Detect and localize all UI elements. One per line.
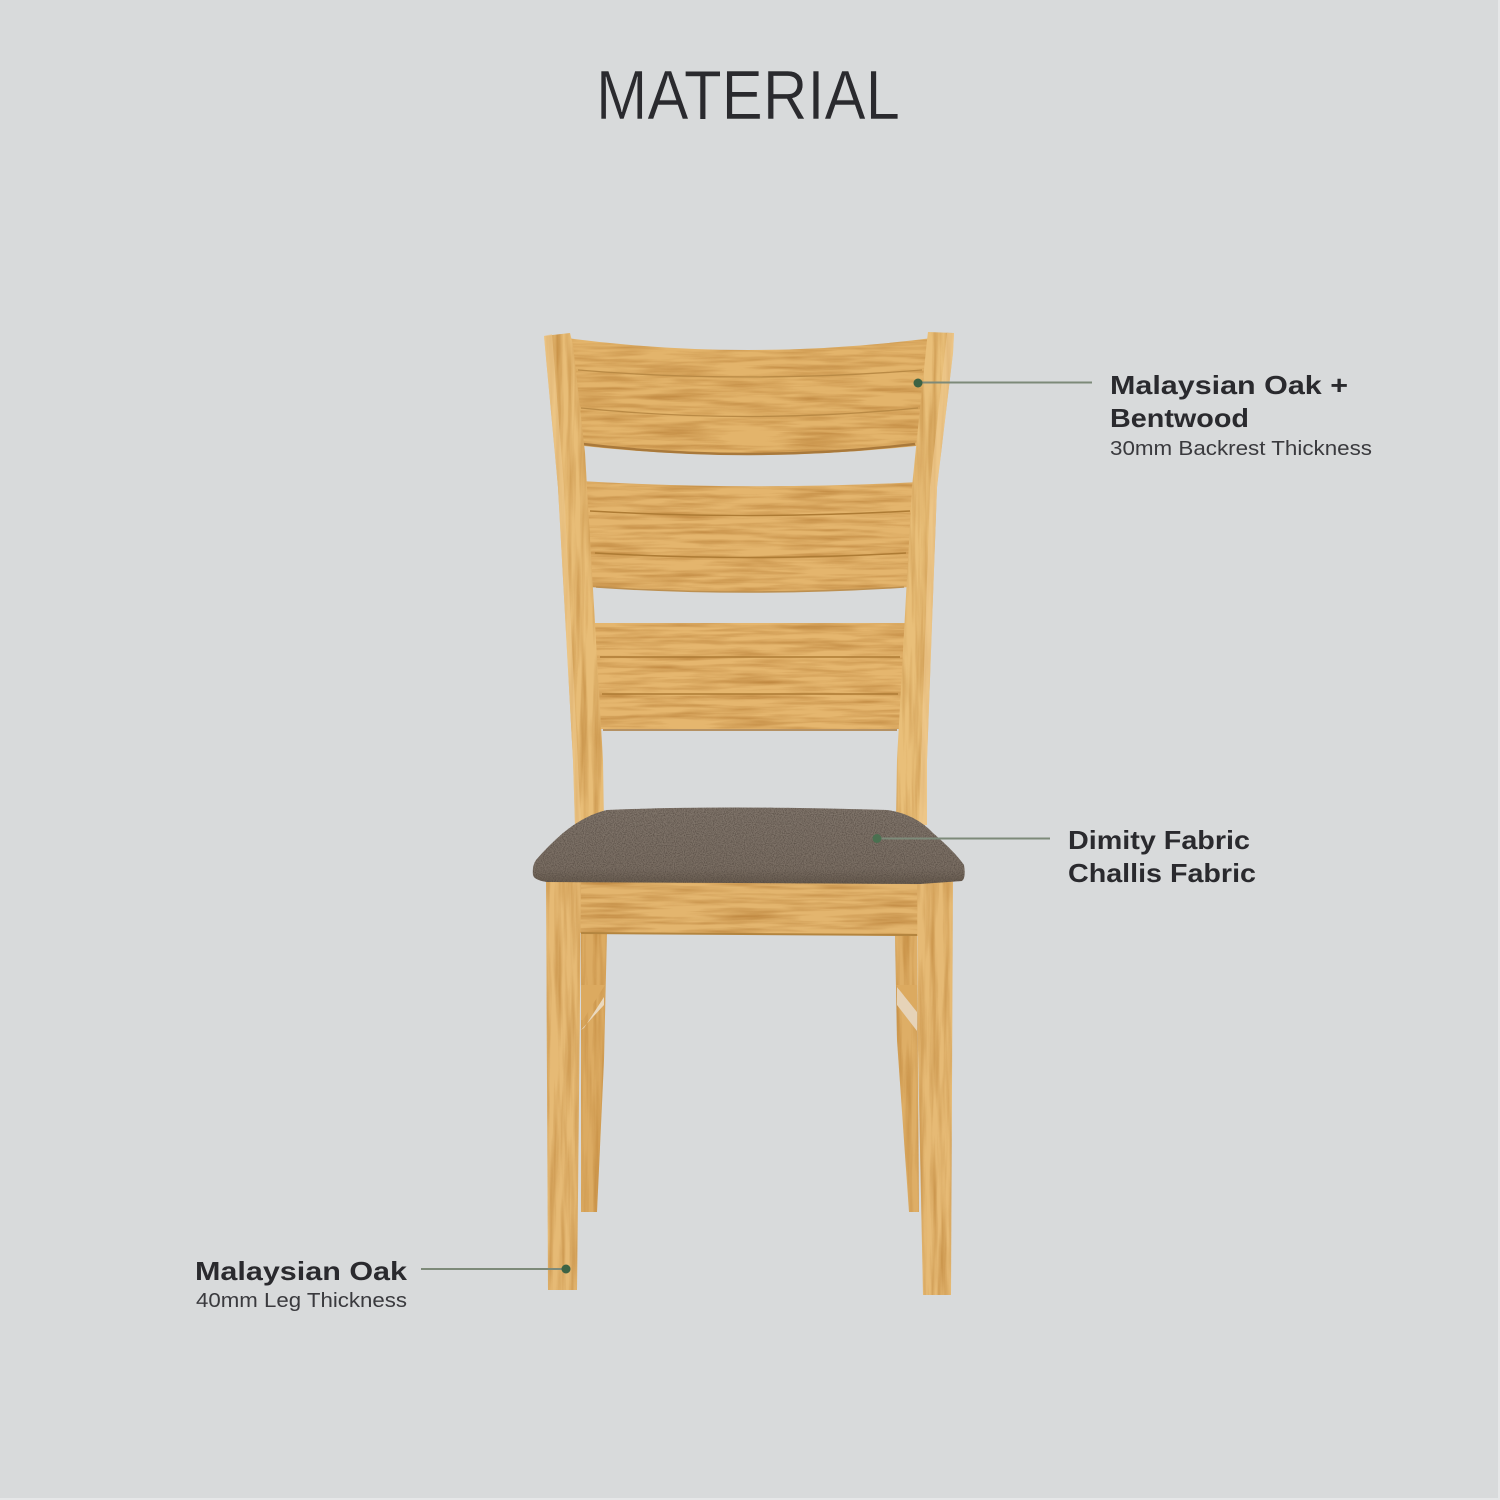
callout: seat fabric	[872, 825, 1256, 888]
marker dot	[562, 1264, 570, 1274]
leg stretchers	[581, 985, 917, 1031]
label heading second line: Bentwood	[1110, 403, 1249, 433]
leader line	[421, 1268, 566, 1270]
label heading: Malaysian Oak +	[1110, 370, 1348, 400]
label detail: 40mm Leg Thickness	[196, 1290, 407, 1312]
chair illustration	[533, 332, 965, 1295]
leader line	[918, 382, 1092, 384]
callout: leg material	[195, 1256, 570, 1312]
callout: backrest material	[914, 370, 1372, 460]
label detail: 30mm Backrest Thickness	[1110, 438, 1372, 460]
left back post	[544, 333, 604, 825]
title: MATERIAL	[596, 56, 900, 134]
front left leg	[546, 876, 581, 1290]
label heading: Malaysian Oak	[195, 1256, 408, 1286]
seat apron	[578, 876, 920, 936]
right back post	[896, 332, 954, 825]
leader line	[877, 838, 1050, 840]
front right leg	[917, 876, 953, 1295]
label second line: Challis Fabric	[1068, 858, 1256, 888]
marker dot	[872, 834, 882, 843]
middle backrest slat	[580, 481, 920, 592]
marker dot	[914, 378, 922, 388]
upholstered seat	[533, 808, 965, 884]
back legs	[581, 930, 919, 1212]
label first line: Dimity Fabric	[1068, 825, 1250, 855]
lower backrest slat	[590, 623, 910, 730]
top backrest slat	[566, 338, 932, 455]
